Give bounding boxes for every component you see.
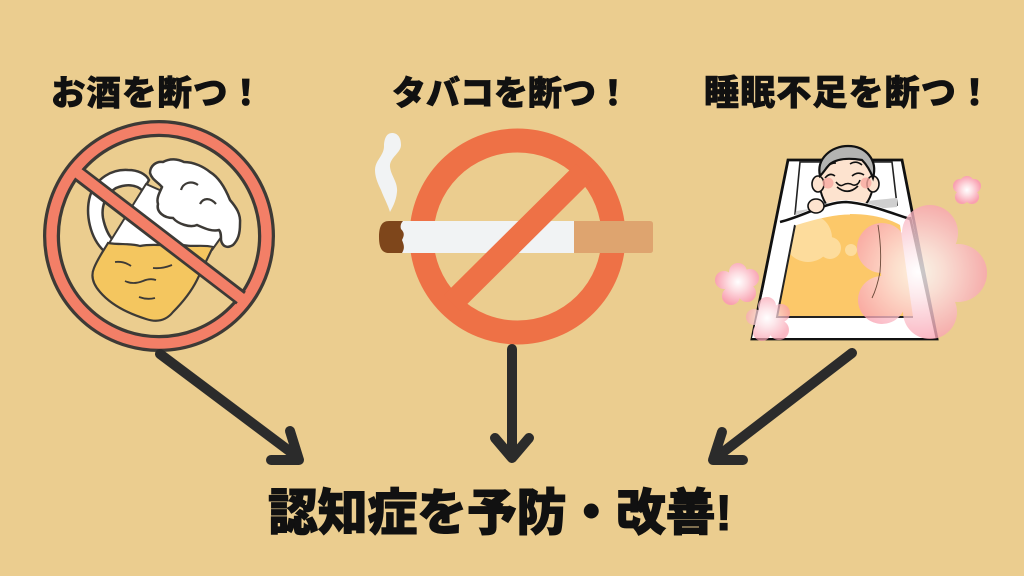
prohibition bar <box>79 174 241 298</box>
bed right edge <box>910 217 937 339</box>
smoke <box>375 133 401 212</box>
hand <box>808 199 824 213</box>
flower top right <box>953 176 981 204</box>
arrow: alcohol to prevention <box>160 354 299 460</box>
blanket crease <box>872 225 881 298</box>
left ear <box>812 176 824 192</box>
head <box>820 156 873 204</box>
cigarette filter <box>574 221 653 253</box>
blanket <box>752 200 937 338</box>
beer foam top <box>150 159 240 247</box>
arrow: tobacco to prevention <box>495 349 529 458</box>
flower right large <box>857 205 987 339</box>
icon: no beer <box>52 128 266 344</box>
flower bottom left <box>746 297 790 341</box>
no-smoking ring <box>422 140 614 332</box>
beer handle <box>88 170 149 251</box>
blanket orange panel <box>777 214 913 317</box>
heading: quit sleep deprivation: 睡眠不足を断つ！ <box>704 74 992 113</box>
heading: quit alcohol: お酒を断つ！ <box>51 75 263 113</box>
face <box>825 162 864 191</box>
beer mug glass <box>108 184 232 250</box>
icon: sleeping elderly man <box>715 146 987 341</box>
no-smoking bar <box>452 172 584 303</box>
conclusion text: 認知症を予防・改善! <box>268 485 732 541</box>
icon: no smoking <box>375 133 653 332</box>
cigarette tip <box>379 221 404 253</box>
pillow <box>795 162 897 214</box>
hair <box>819 146 874 178</box>
arrow: sleep to prevention <box>713 353 852 460</box>
blanket highlights <box>790 218 857 262</box>
right ear <box>867 176 879 192</box>
bed sheet <box>752 160 937 339</box>
heading: quit tobacco: タバコを断つ！ <box>392 75 630 113</box>
flower left <box>715 263 759 305</box>
prohibition ring <box>52 128 266 344</box>
beer liquid <box>92 243 213 321</box>
bed footer shadow <box>753 330 937 338</box>
cigarette paper <box>400 221 574 253</box>
